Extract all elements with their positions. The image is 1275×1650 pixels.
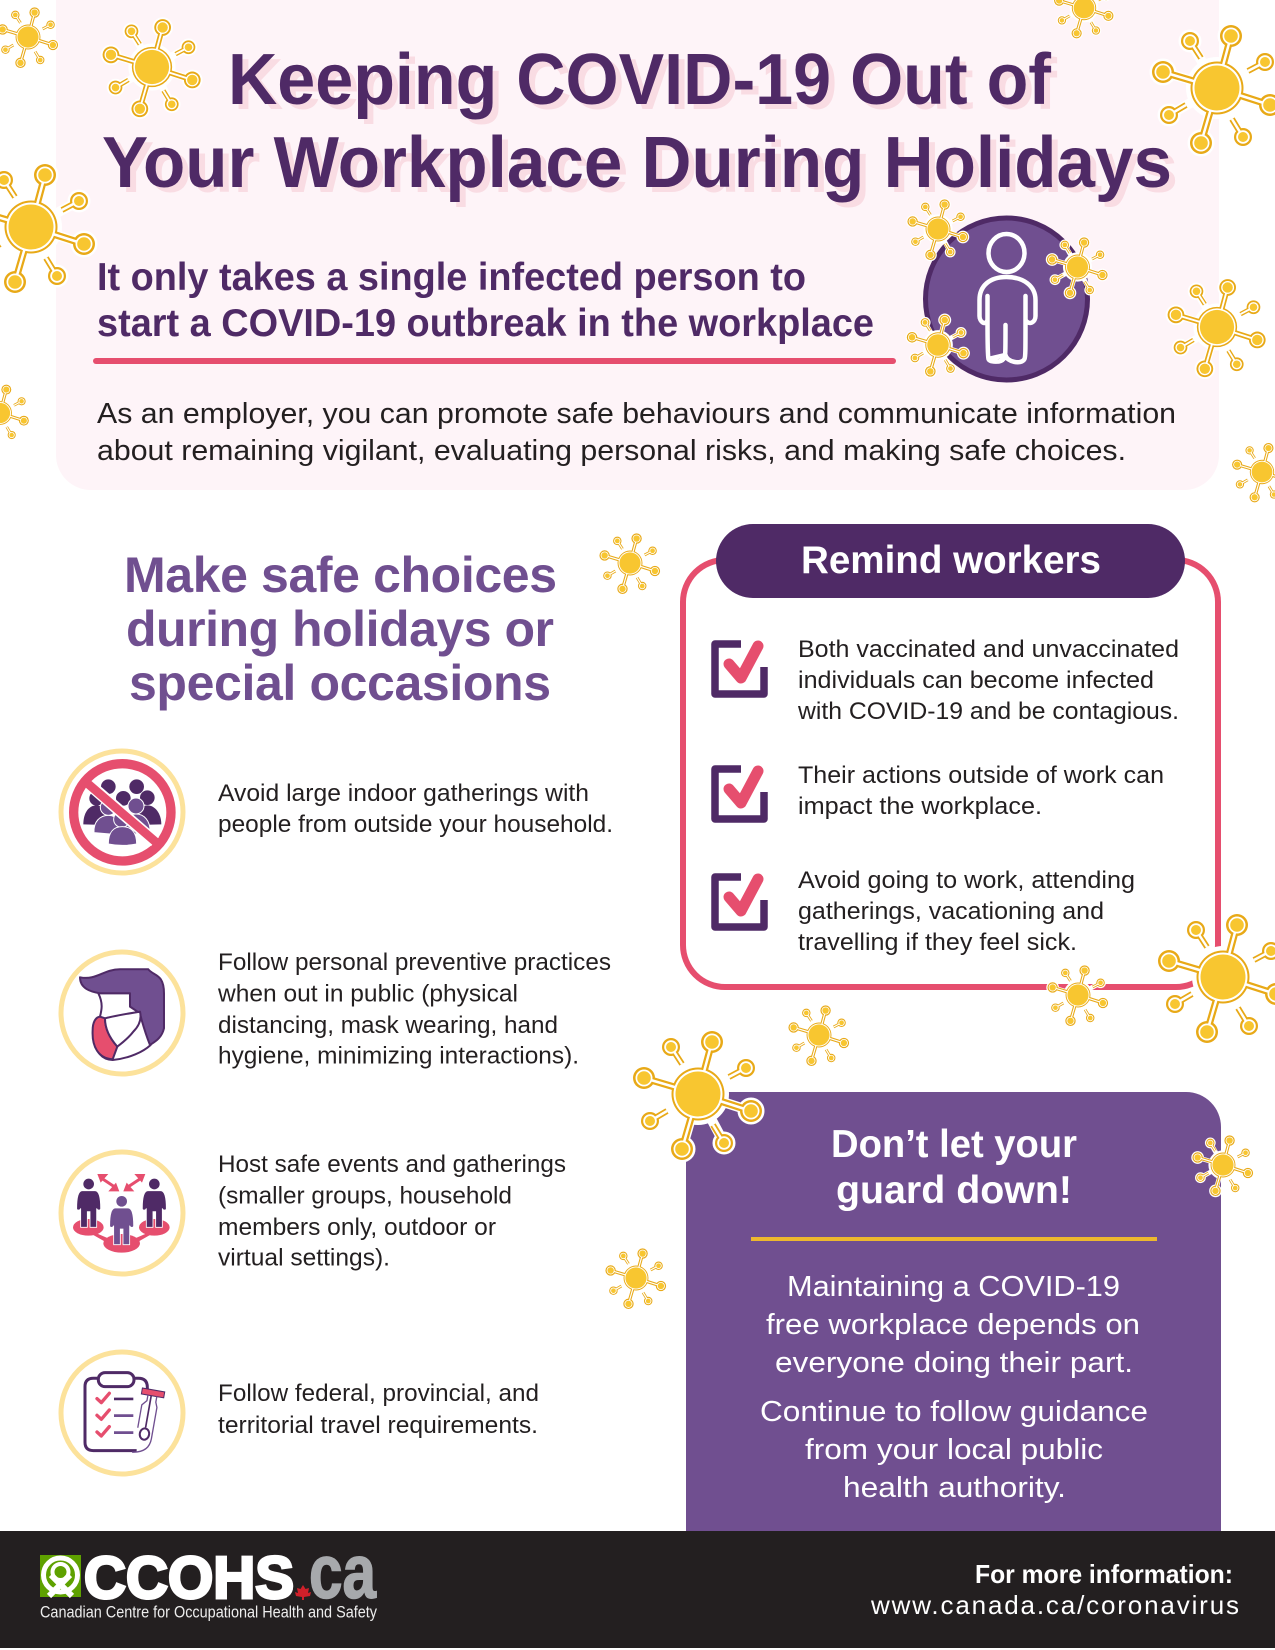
text: workplace depends on everyone: free workplace depends on	[766, 1309, 1140, 1341]
text: avoid going to work: travelling if they feel sick.	[798, 929, 1077, 956]
yellow divider	[751, 1237, 1157, 1241]
text: avoid going to work: Avoid going to work, attending	[798, 867, 1135, 894]
text: travel requirements: territorial travel requirements.	[218, 1412, 538, 1439]
icon: checkbox 2	[715, 769, 764, 819]
organization name: Canadian Centre for Occupational Health and Safety	[40, 1604, 378, 1622]
footer	[0, 1530, 1275, 1648]
text: personal preventive practices: distancing, mask wearing, hand	[218, 1012, 558, 1039]
heading: make safe choices: special occasions	[129, 655, 551, 711]
icon: virus right middle	[1168, 279, 1266, 377]
title: Keeping COVID-19 Out of	[228, 40, 1052, 120]
text: actions outside of work: impact the workplace.	[798, 793, 1042, 820]
subheading	[97, 256, 874, 345]
text: workplace depends on everyone: everyone doing their part.	[775, 1347, 1133, 1379]
text: for more information: For more information:	[975, 1559, 1233, 1589]
heading: make safe choices	[124, 547, 557, 711]
text: personal preventive practices: when out in public (physical	[217, 980, 518, 1008]
text: vaccinated and unvaccinated: Both vaccinated and unvaccinated	[798, 636, 1179, 663]
intro text: about remaining vigilant, evaluating personal risks, and making safe choices.	[97, 435, 1126, 467]
icon: clipboard and test	[61, 1352, 183, 1474]
text: for more information: www.canada.ca/coronavirus	[870, 1590, 1239, 1620]
icon: virus near person, top	[907, 199, 968, 260]
text: host safe events	[218, 1151, 566, 1272]
heading: remind workers: Remind workers	[801, 539, 1101, 582]
icon: virus near person, right	[1047, 237, 1108, 298]
icon: virus on remind box edge	[1047, 965, 1108, 1026]
icon: virus top centre	[1054, 0, 1113, 38]
icon: virus left of purple panel, lower	[605, 1248, 666, 1309]
icon: virus below remind box	[788, 1005, 849, 1066]
footer background	[0, 1531, 1275, 1648]
text: avoid going to work: gatherings, vacationing and	[798, 898, 1104, 925]
text: host safe events: (smaller groups, household	[218, 1182, 512, 1210]
heading pill	[716, 524, 1185, 598]
wordmark: CCOHS: CCOHS	[84, 1545, 294, 1611]
subheading: start a COVID-19 outbreak in the workplace	[97, 302, 874, 345]
icon: virus on purple panel right	[1192, 1135, 1253, 1196]
icon: maple leaf	[295, 1585, 311, 1600]
icon: virus on purple panel corner	[633, 1031, 762, 1160]
intro text	[97, 398, 1176, 467]
icon: person wearing mask	[61, 952, 183, 1074]
panel: remind workers	[683, 524, 1218, 987]
text: avoid large gatherings: people from outside your household.	[218, 811, 613, 838]
text: host safe events: Host safe events and gatherings	[218, 1151, 566, 1178]
icon: virus beside title	[103, 19, 201, 117]
icon: virus near person, bottom	[907, 315, 969, 377]
text: vaccinated and unvaccinated: individuals can become infected	[798, 667, 1154, 694]
icon: virus on remind box corner	[1158, 914, 1275, 1043]
heading: guard down	[831, 1123, 1077, 1212]
text: personal preventive practices: hygiene, minimizing interactions).	[218, 1042, 579, 1070]
icon: virus left large	[0, 164, 95, 293]
icon: checkbox 3	[715, 877, 764, 927]
icon: virus top left small	[0, 7, 58, 68]
intro text: As an employer, you can promote safe behaviours and communicate information	[97, 398, 1176, 430]
text: host safe events: virtual settings).	[218, 1244, 390, 1272]
heading: make safe choices: Make safe choices	[124, 547, 557, 603]
text: host safe events: members only, outdoor or	[218, 1214, 496, 1241]
icon: virus right edge small	[1232, 443, 1275, 502]
logo: CCOHS	[40, 1530, 378, 1622]
text: avoid large gatherings	[218, 780, 613, 838]
text: travel requirements: Follow federal, provincial, and	[218, 1380, 539, 1407]
title: Your Workplace During Holidays	[102, 123, 1172, 203]
text: follow guidance: from your local public	[805, 1434, 1103, 1466]
icon: no large gatherings	[61, 751, 183, 873]
text: follow guidance: Continue to follow guidance	[760, 1396, 1148, 1428]
icon: small safe gathering	[61, 1152, 183, 1274]
pink outline box	[683, 560, 1218, 987]
text: follow guidance: health authority.	[843, 1472, 1066, 1504]
text: workplace depends on everyone: Maintaining a COVID-19	[787, 1271, 1120, 1303]
text: avoid going to work	[798, 867, 1135, 956]
icon: virus top right large	[1152, 25, 1275, 154]
text: actions outside of work: Their actions outside of work can	[798, 762, 1164, 789]
heading: guard down: guard down!	[836, 1169, 1072, 1212]
icon: infected person in purple circle	[926, 218, 1088, 380]
heading: make safe choices: during holidays or	[126, 601, 554, 657]
icon: checkbox 1	[715, 644, 764, 694]
text: for more information	[870, 1559, 1239, 1620]
text: follow guidance	[760, 1396, 1148, 1504]
pink divider under subheading	[93, 358, 896, 364]
text: vaccinated and unvaccinated	[797, 636, 1179, 725]
text: personal preventive practices	[217, 949, 611, 1070]
wordmark: ca: ca	[309, 1530, 377, 1615]
text: vaccinated and unvaccinated: with COVID-19 and be contagious.	[797, 698, 1179, 725]
heading: guard down: Don’t let your	[831, 1123, 1077, 1166]
text: travel requirements	[218, 1380, 539, 1439]
panel: header background	[56, 0, 1219, 490]
icon: CCOHS emblem	[40, 1555, 81, 1597]
subheading: It only takes a single infected person to	[97, 256, 806, 299]
text: avoid large gatherings: Avoid large indoor gatherings with	[218, 780, 589, 807]
text: workplace depends on everyone	[766, 1271, 1140, 1379]
text: personal preventive practices: Follow personal preventive practices	[218, 949, 611, 976]
purple panel background	[686, 1092, 1221, 1531]
icon: virus beside heading	[599, 533, 660, 594]
text: actions outside of work	[798, 762, 1164, 820]
panel: dont let your guard down	[686, 1092, 1221, 1531]
title	[102, 40, 1172, 203]
icon: virus left edge small	[0, 385, 29, 443]
